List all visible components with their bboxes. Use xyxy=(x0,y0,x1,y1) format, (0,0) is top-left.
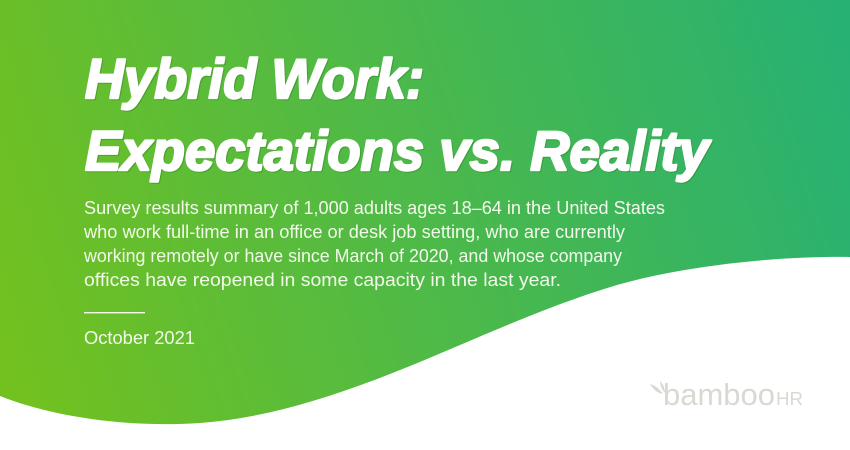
logo wordmark: HR xyxy=(776,389,803,409)
title xyxy=(85,47,712,182)
divider line xyxy=(84,312,145,313)
date: October 2021 xyxy=(84,328,195,348)
title: Hybrid Work: xyxy=(85,47,424,110)
BambooHR logo xyxy=(650,377,803,412)
logo wordmark: bamboo xyxy=(663,377,775,412)
survey description xyxy=(83,198,665,290)
survey description: who work full-time in an office or desk job setting, who are currently xyxy=(83,222,625,242)
icon: bamboo leaves xyxy=(650,381,665,394)
survey description: working remotely or have since March of 2020, and whose company xyxy=(83,246,622,266)
title: Expectations vs. Reality xyxy=(85,119,712,182)
survey description: offices have reopened in some capacity in the last year. xyxy=(84,270,561,290)
survey description: Survey results summary of 1,000 adults ages 18–64 in the United States xyxy=(84,198,665,218)
